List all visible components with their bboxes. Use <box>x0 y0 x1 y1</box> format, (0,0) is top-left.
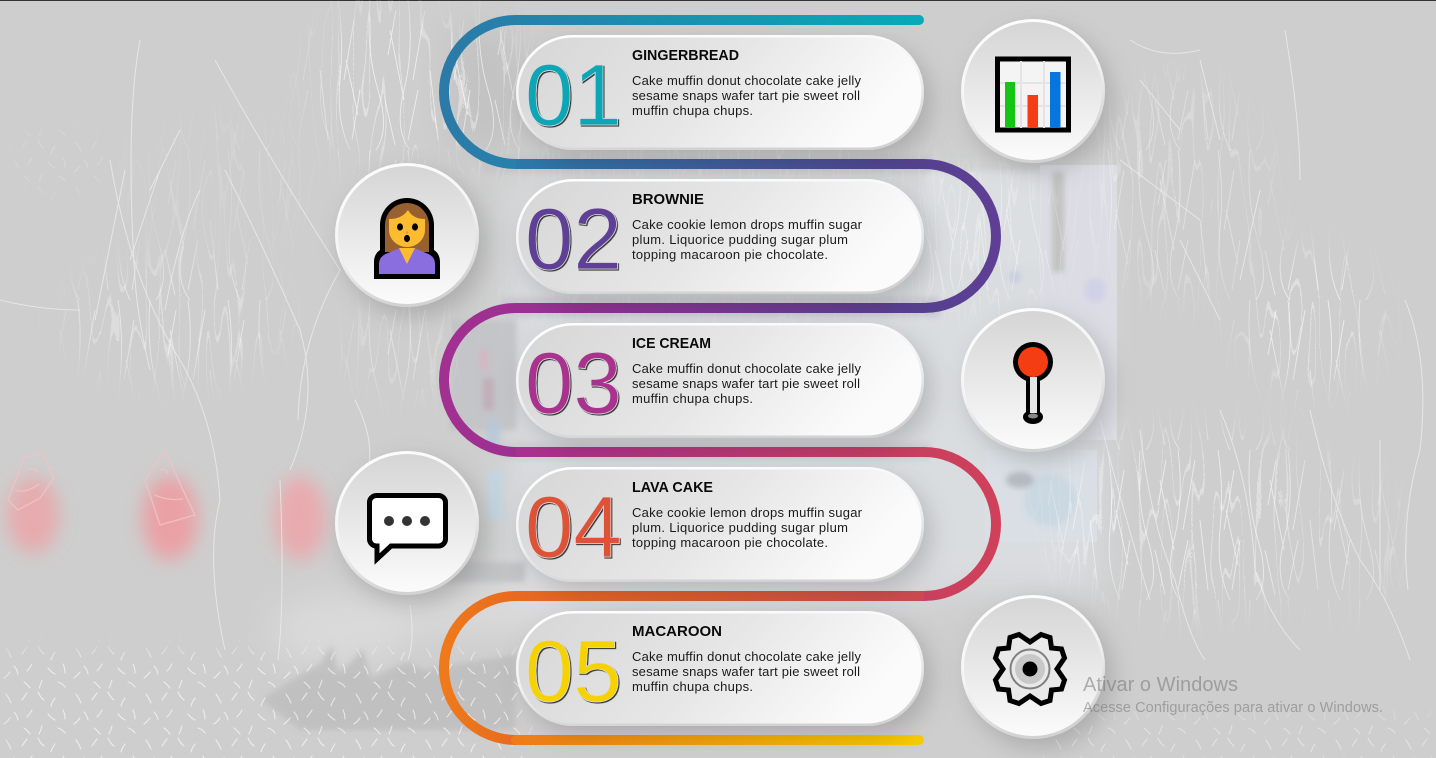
number 02: 02 <box>525 191 622 288</box>
body text: Cake cookie lemon drops muffin sugar <box>632 505 863 520</box>
number 04: 04 <box>525 479 622 576</box>
body text: plum. Liquorice pudding sugar plum <box>632 520 848 535</box>
body text: muffin chupa chups. <box>632 679 753 694</box>
icon: speech bubble <box>369 495 446 559</box>
number 03: 03 <box>525 335 622 432</box>
icon disc: pushpin <box>961 308 1105 452</box>
body text <box>632 649 862 694</box>
panel: 03 ice cream <box>516 323 924 438</box>
crowd silhouettes <box>262 645 515 730</box>
body text: muffin chupa chups. <box>632 391 753 406</box>
body text: topping macaroon pie chocolate. <box>632 535 828 550</box>
panel: 05 macaroon <box>516 611 924 726</box>
body text <box>632 361 862 406</box>
icon: gear <box>996 634 1064 704</box>
body text: Cake muffin donut chocolate cake jelly <box>632 649 862 664</box>
heading: ICE CREAM <box>632 335 711 352</box>
icon: pin <box>1013 342 1053 424</box>
body text: topping macaroon pie chocolate. <box>632 247 828 262</box>
body text: sesame snaps wafer tart pie sweet roll <box>632 88 860 103</box>
body text <box>632 217 863 262</box>
number 01: 01 <box>525 47 622 144</box>
icon: surprised woman <box>374 198 440 279</box>
body text: Cake muffin donut chocolate cake jelly <box>632 361 862 376</box>
windows activation watermark <box>1083 674 1383 716</box>
windows activation watermark: Ativar o Windows <box>1083 674 1238 696</box>
windows activation watermark: Acesse Configurações para ativar o Windows. <box>1083 700 1383 716</box>
body text: sesame snaps wafer tart pie sweet roll <box>632 664 860 679</box>
number 05: 05 <box>525 623 622 720</box>
panel: 01 gingerbread <box>516 35 924 150</box>
skull artwork <box>8 450 195 525</box>
panel: 02 brownie <box>516 179 924 294</box>
heading: MACAROON <box>632 623 722 640</box>
icon: bar chart <box>998 59 1068 130</box>
body text: plum. Liquorice pudding sugar plum <box>632 232 848 247</box>
body text <box>632 505 863 550</box>
icon disc: person <box>335 163 479 307</box>
body text: Cake cookie lemon drops muffin sugar <box>632 217 863 232</box>
heading: GINGERBREAD <box>632 47 739 64</box>
panel: 04 lava cake <box>516 467 924 582</box>
heading: LAVA CAKE <box>632 479 713 496</box>
icon disc: bar chart <box>961 19 1105 163</box>
body text: muffin chupa chups. <box>632 103 753 118</box>
body text: sesame snaps wafer tart pie sweet roll <box>632 376 860 391</box>
serpentine gradient ribbon <box>444 20 996 740</box>
stage backdrop panels <box>985 165 1117 542</box>
streamer texture <box>77 0 1379 610</box>
icon disc: chat <box>335 451 479 595</box>
heading: BROWNIE <box>632 191 704 208</box>
icon disc: gear <box>961 595 1105 739</box>
body text: Cake muffin donut chocolate cake jelly <box>632 73 862 88</box>
stage figures <box>480 271 1106 526</box>
body text <box>632 73 862 118</box>
red stage lights <box>7 476 326 560</box>
